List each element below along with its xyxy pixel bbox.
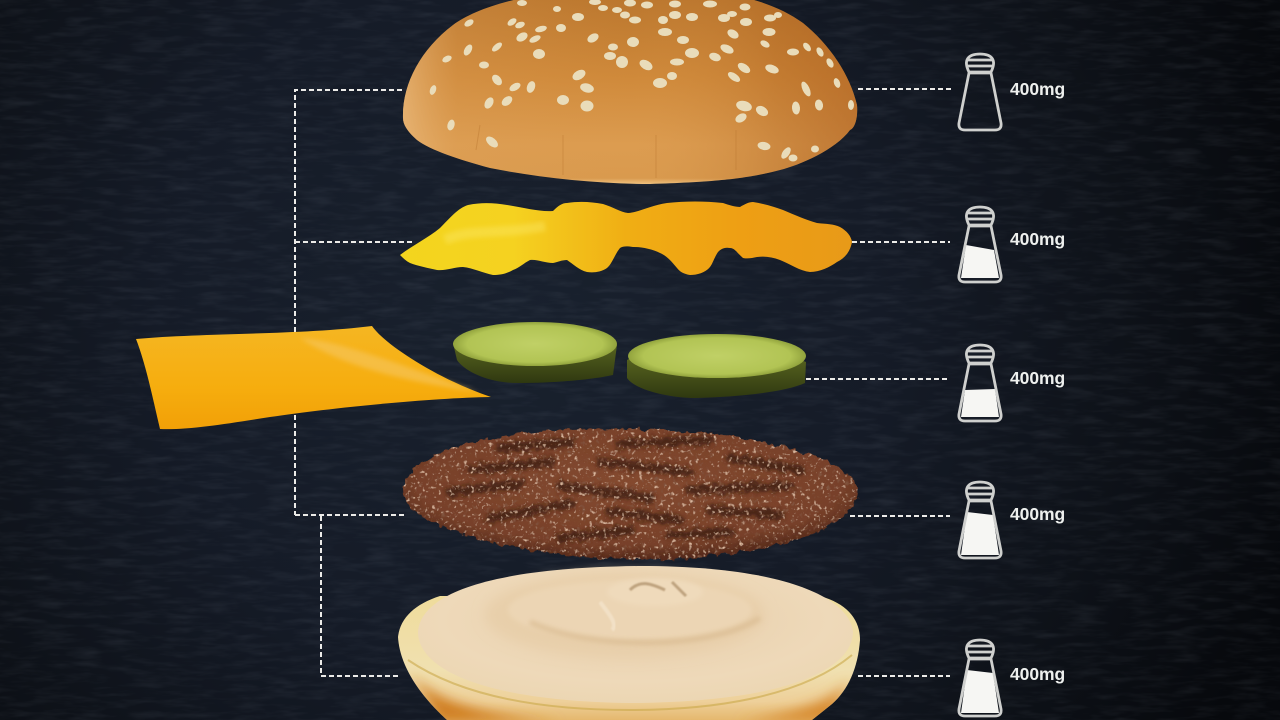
label: 400mg xyxy=(1010,368,1065,388)
salt shaker 2: half full xyxy=(959,207,1065,282)
mayonnaise-topped bottom bun xyxy=(398,566,860,720)
beef patty xyxy=(403,429,858,560)
left pickle xyxy=(453,322,617,383)
cheese slice xyxy=(136,326,491,429)
salt shaker 4: mostly full xyxy=(959,482,1065,558)
label: 400mg xyxy=(1010,229,1065,249)
salt shaker 5: mostly full xyxy=(959,640,1065,716)
label: 400mg xyxy=(1010,504,1065,524)
label: 400mg xyxy=(1010,664,1065,684)
mayonnaise xyxy=(418,566,853,703)
label: 400mg xyxy=(1010,79,1065,99)
salt shaker 1: empty xyxy=(959,54,1065,130)
sesame seeds xyxy=(428,0,854,162)
melted cheese layer xyxy=(400,202,852,275)
dashed connector lines xyxy=(295,89,952,676)
top sesame bun xyxy=(403,0,857,184)
salt shaker 3: half full xyxy=(959,345,1065,421)
right pickle xyxy=(627,334,806,398)
